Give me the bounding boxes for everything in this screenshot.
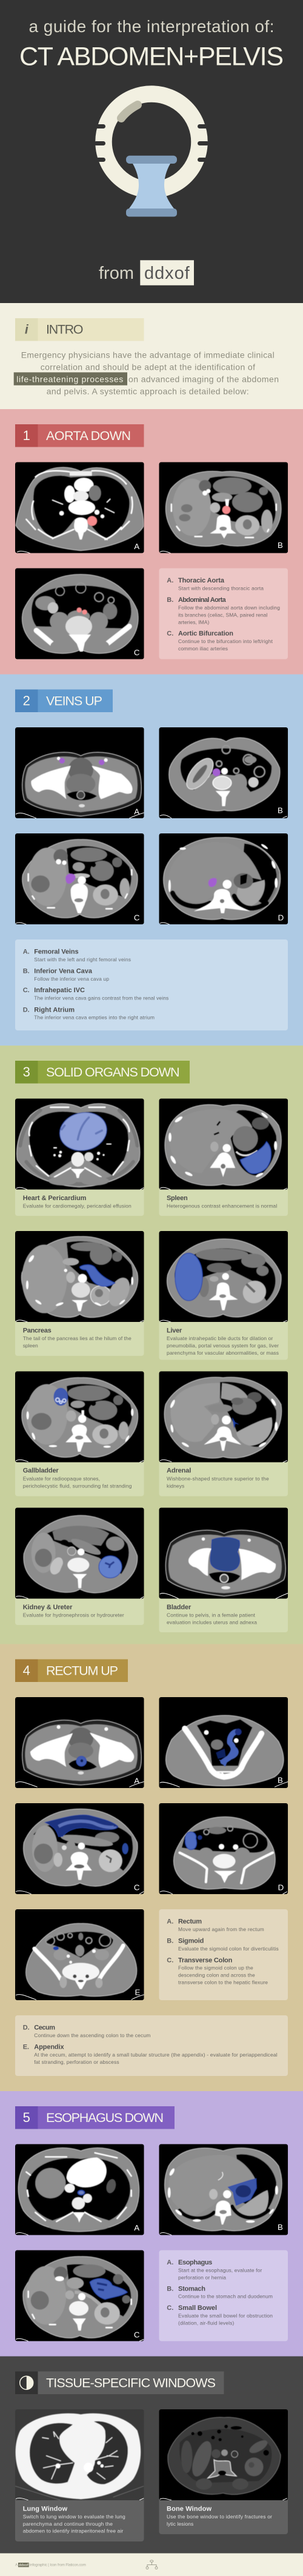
card: adrenal: Adrenal <box>167 1467 191 1475</box>
legend: rectum D-E: Appendix <box>34 2044 64 2051</box>
scan: right atrium D: D <box>278 913 284 923</box>
icon: contrast circle <box>20 2376 33 2389</box>
heading: esophagus down <box>15 2106 175 2129</box>
intro text: correlation and should be adept at the identification of <box>41 362 255 372</box>
legend: rectum A-C: Evaluate the sigmoid colon for diverticulitis <box>178 1946 279 1952</box>
card: gallbladder: Gallbladder <box>23 1467 59 1475</box>
legend: rectum A-C: B. <box>167 1938 173 1945</box>
card: gallbladder <box>15 1371 144 1496</box>
legend: rectum A-C: Follow the sigmoid colon up the <box>178 1965 253 1971</box>
legend: veins: Right Atrium <box>34 1006 75 1013</box>
footer credit <box>15 2563 86 2568</box>
scan: esophagus A: A <box>134 2223 139 2232</box>
legend: veins: C. <box>23 987 30 994</box>
footer <box>0 2553 303 2576</box>
heading: solid organs <box>15 1061 190 1084</box>
title: CT ABDOMEN+PELVIS <box>19 42 284 71</box>
legend: rectum D-E: D. <box>23 2024 30 2032</box>
scan: inferior vena cava B: B <box>278 806 283 815</box>
legend: esophagus: (dilation, air-fluid levels) <box>178 2320 234 2326</box>
heading: aorta down: 1 <box>23 428 30 443</box>
heading: intro: INTRO <box>46 322 84 337</box>
scan: inferior vena cava B <box>159 727 288 818</box>
scan: small bowel C <box>15 2250 144 2341</box>
legend: aorta: A. <box>167 577 173 584</box>
legend: esophagus: Stomach <box>178 2285 205 2292</box>
card: bone window: Use the bone window to identify fractures or <box>167 2514 272 2520</box>
legend: aorta: arteries, IMA) <box>178 619 209 626</box>
scan: abdominal aorta B <box>159 462 288 553</box>
legend: aorta: its branches (celiac, SMA, paired renal <box>178 612 267 618</box>
legend: aorta: Continue to the bifurcation into left/right <box>178 638 273 644</box>
panel: tissue-specific windows <box>0 2357 303 2553</box>
card: pancreas <box>15 1231 144 1356</box>
card: lung window <box>15 2409 144 2541</box>
scan: appendix E: E <box>135 1988 141 1997</box>
legend: veins: A. <box>23 949 30 956</box>
footer credit: ddxof <box>19 2564 28 2568</box>
legend: aorta: C. <box>167 630 173 637</box>
heading: solid organs: 3 <box>23 1064 30 1079</box>
scan: aortic bifurcation C <box>15 569 144 659</box>
card: heart and pericardium <box>15 1098 144 1216</box>
icon: CT scanner <box>94 94 209 217</box>
legend: aorta <box>159 569 288 659</box>
legend: veins: The inferior vena cava gains contrast from the renal veins <box>34 995 168 1001</box>
scan: esophagus A <box>15 2144 144 2235</box>
legend: esophagus: Start at the esophagus, evaluate for <box>178 2267 262 2274</box>
heading: veins up: 2 <box>23 693 30 708</box>
card: kidney and ureter: Kidney & Ureter <box>23 1604 73 1611</box>
card: liver: Evaluate intrahepatic bile ducts for dilation or <box>167 1335 273 1341</box>
panel: esophagus down <box>0 2091 303 2357</box>
scan: infrahepatic IVC C: C <box>134 913 140 923</box>
card: bladder: Bladder <box>167 1604 191 1611</box>
legend: rectum A-C: C. <box>167 1957 173 1964</box>
scan: femoral veins A: A <box>134 807 139 816</box>
legend: esophagus: B. <box>167 2285 173 2292</box>
intro text: and pelvis. A systemtic approach is detailed below: <box>47 387 249 396</box>
heading: aorta down: AORTA DOWN <box>46 429 131 443</box>
heading: rectum up <box>15 1660 128 1682</box>
legend: veins: D. <box>23 1006 30 1013</box>
card: bone window: lytic lesions <box>167 2521 193 2527</box>
heading: tissue-specific windows: TISSUE-SPECIFIC WINDOWS <box>46 2375 216 2390</box>
legend: aorta: Thoracic Aorta <box>178 577 225 584</box>
card: spleen <box>159 1098 288 1216</box>
panel: solid organs down <box>0 1046 303 1644</box>
scan: abdominal aorta B: B <box>278 541 283 550</box>
header panel <box>0 0 303 303</box>
legend: veins: Femoral Veins <box>34 949 79 956</box>
heading: aorta down <box>15 424 144 447</box>
legend: rectum D-E: E. <box>23 2044 29 2051</box>
card: spleen: Spleen <box>167 1195 188 1202</box>
card: bladder <box>159 1508 288 1632</box>
heading: tissue-specific windows <box>15 2371 224 2394</box>
scan: cecum D: D <box>278 1883 284 1892</box>
scan: transverse colon C: C <box>134 1883 140 1892</box>
footer credit: A <box>15 2564 18 2568</box>
card: bone window: Bone Window <box>167 2505 211 2512</box>
legend: rectum A-C: Transverse Colon <box>178 1957 233 1964</box>
legend: aorta: B. <box>167 596 173 604</box>
card: adrenal <box>159 1371 288 1496</box>
intro text <box>14 350 279 396</box>
scan: right atrium D <box>159 833 288 925</box>
card: liver: Liver <box>167 1327 182 1335</box>
legend: veins: B. <box>23 968 30 975</box>
legend: aorta: Abdominal Aorta <box>178 596 227 604</box>
legend: esophagus: perforation or hernia <box>178 2275 226 2281</box>
legend: rectum D-E: fat stranding, perforation or abscess <box>34 2059 119 2065</box>
scan: appendix E <box>15 1909 144 2000</box>
scan: cecum D <box>159 1803 288 1894</box>
card: liver: parenchyma for vascular abnormalities, or mass <box>167 1350 279 1356</box>
card: pancreas: The tail of the pancreas lies at the hilum of the <box>23 1335 132 1341</box>
card: bladder: Continue to pelvis, in a female patient <box>167 1612 256 1618</box>
legend: veins: The inferior vena cava empties into the right atrium <box>34 1015 155 1021</box>
legend: veins: Start with the left and right femoral veins <box>34 956 131 963</box>
legend: aorta: Aortic Bifurcation <box>178 630 233 637</box>
legend: aorta: Follow the abdominal aorta down including <box>178 605 280 611</box>
legend: rectum A-C: transverse colon to the hepatic flexure <box>178 1980 268 1986</box>
card: liver <box>159 1231 288 1360</box>
legend: veins: Infrahepatic IVC <box>34 987 85 994</box>
scan: infrahepatic IVC C <box>15 833 144 926</box>
intro text: Emergency physicians have the advantage of immediate clinical <box>21 350 275 360</box>
scan: rectum A: A <box>134 1777 139 1786</box>
legend: rectum D-E <box>15 2015 288 2076</box>
heading: solid organs: SOLID ORGANS DOWN <box>46 1065 179 1079</box>
subtitle: a guide for the interpretation of: <box>29 17 274 36</box>
legend: veins: Inferior Vena Cava <box>34 968 93 975</box>
from ddxof: from <box>99 264 134 283</box>
heading: esophagus down: 5 <box>23 2110 30 2125</box>
panel: rectum up <box>0 1644 303 2091</box>
from ddxof <box>99 260 194 285</box>
scan: femoral veins A <box>15 727 144 818</box>
legend: esophagus: Esophagus <box>178 2259 212 2266</box>
heading: veins up: VEINS UP <box>46 693 102 708</box>
card: gallbladder: pericholecystic fluid, surrounding fat stranding <box>23 1483 132 1489</box>
legend: rectum A-C: Rectum <box>178 1918 202 1926</box>
scan: sigmoid B <box>159 1697 288 1788</box>
legend: rectum D-E: Continue down the ascending colon to the cecum <box>34 2032 150 2038</box>
card: kidney and ureter: Evaluate for hydronephrosis or hydroureter <box>23 1612 124 1618</box>
intro text: on advanced imaging of the abdomen <box>128 375 279 384</box>
scan: stomach B: B <box>278 2223 283 2232</box>
card: lung window: Lung Window <box>23 2505 67 2512</box>
card: pancreas: spleen <box>23 1343 38 1349</box>
scan: transverse colon C <box>15 1803 144 1894</box>
card: kidney and ureter <box>15 1508 144 1625</box>
scan: rectum A <box>15 1697 144 1788</box>
footer credit: infographic | Icon from Flaticon.com <box>30 2564 86 2568</box>
card: adrenal: Wishbone-shaped structure superior to the <box>167 1475 269 1481</box>
card: bone window <box>159 2409 288 2534</box>
heading: intro: i <box>25 323 29 337</box>
icon: flowchart logo <box>146 2560 158 2569</box>
card: bladder: evaluation includes uterus and adnexa <box>167 1619 257 1625</box>
legend: esophagus <box>159 2250 288 2341</box>
legend: aorta: common iliac arteries <box>178 646 228 652</box>
panel: intro <box>0 303 303 409</box>
panel: veins up <box>0 674 303 1046</box>
scan: aortic bifurcation C: C <box>134 648 140 657</box>
legend: rectum D-E: At the cecum, attempt to identify a small tubular structure (the appendix) - evaluate for periappendiceal <box>34 2052 278 2058</box>
card: heart and pericardium: Heart & Pericardium <box>23 1195 87 1202</box>
heading: veins up <box>15 690 113 712</box>
legend: esophagus: Continue to the stomach and duodenum <box>178 2294 273 2300</box>
scan: stomach B <box>159 2144 288 2235</box>
legend: rectum A-C: descending colon and across the <box>178 1972 255 1978</box>
card: pancreas: Pancreas <box>23 1327 52 1335</box>
card: heart and pericardium: Evaluate for cardiomegaly, pericardial effusion <box>23 1203 132 1209</box>
card: spleen: Heterogenous contrast enhancement is normal <box>167 1203 277 1209</box>
heading: intro <box>15 318 144 341</box>
legend: veins <box>15 939 288 1030</box>
legend: aorta: Start with descending thoracic aorta <box>178 586 264 592</box>
legend: rectum A-C: Sigmoid <box>178 1938 204 1945</box>
heading: rectum up: RECTUM UP <box>46 1663 118 1678</box>
scan: thoracic aorta A <box>15 462 144 553</box>
legend: rectum A-C: A. <box>167 1918 173 1926</box>
legend: rectum A-C <box>159 1909 288 2000</box>
heading: rectum up: 4 <box>23 1663 30 1678</box>
scan: small bowel C: C <box>134 2330 140 2339</box>
from ddxof: ddxof <box>144 264 190 283</box>
legend: rectum A-C: Move upward again from the rectum <box>178 1926 264 1932</box>
legend: esophagus: C. <box>167 2304 173 2312</box>
card: adrenal: kidneys <box>167 1483 184 1489</box>
card: liver: pneumobilia, portal venous system for gas, liver <box>167 1343 279 1349</box>
card: lung window: parenchyma and continue through the <box>23 2521 113 2527</box>
card: lung window: Switch to lung window to evaluate the lung <box>23 2514 125 2520</box>
legend: esophagus: Small Bowel <box>178 2304 217 2312</box>
intro text: life-threatening processes <box>16 375 123 384</box>
legend: veins: Follow the inferior vena cava up <box>34 976 109 982</box>
scan: thoracic aorta A: A <box>134 542 139 551</box>
panel: aorta down <box>0 409 303 674</box>
legend: rectum D-E: Cecum <box>34 2024 55 2032</box>
scan: sigmoid B: B <box>278 1776 283 1785</box>
heading: esophagus down: ESOPHAGUS DOWN <box>46 2111 164 2125</box>
card: lung window: abdomen to identify intraperitoneal free air <box>23 2528 124 2534</box>
card: gallbladder: Evaluate for radioopaque stones, <box>23 1475 100 1481</box>
legend: esophagus: A. <box>167 2259 173 2266</box>
legend: esophagus: Evaluate the small bowel for obstruction <box>178 2313 273 2319</box>
